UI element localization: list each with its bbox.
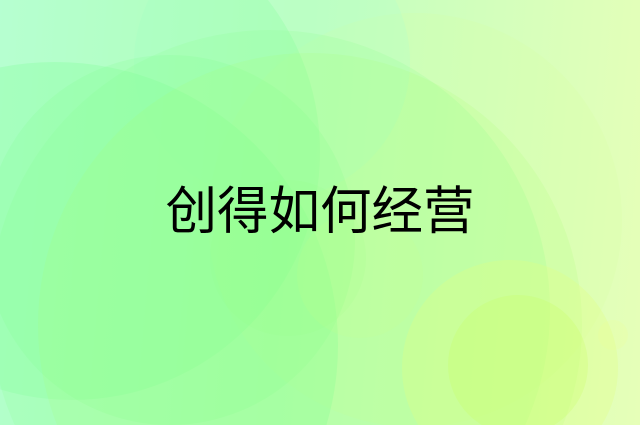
title: 创得如何经营: [165, 182, 474, 240]
